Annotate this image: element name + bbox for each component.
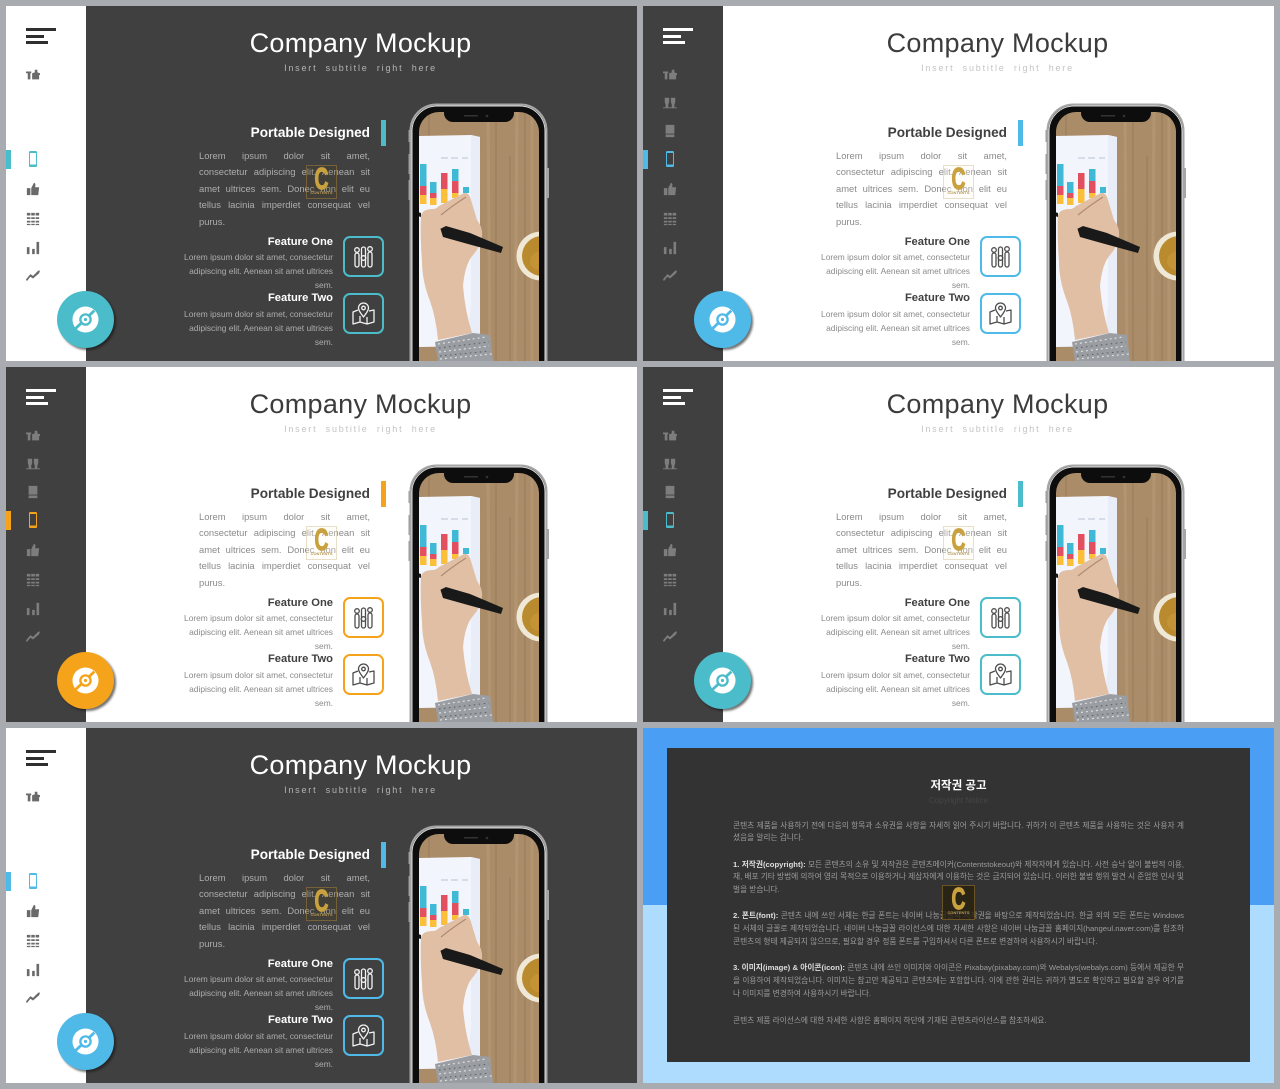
icon: disc button	[56, 1012, 114, 1070]
feature one text: adipiscing elit. Aenean sit amet ultrices	[189, 266, 333, 276]
feature two text: Lorem ipsum dolor sit amet, consectetur	[821, 309, 970, 319]
phone mockup	[1046, 104, 1186, 361]
icon: map	[980, 654, 1021, 695]
subtitle: Insert subtitle right here	[284, 424, 437, 434]
icon: map	[343, 654, 384, 695]
icon: disc button	[56, 290, 114, 348]
feature two text: adipiscing elit. Aenean sit amet ultrices	[189, 1045, 333, 1055]
phone mockup	[408, 104, 549, 361]
sidebar	[6, 6, 86, 361]
watermark: CONTENTS	[310, 190, 332, 195]
watermark	[306, 526, 337, 560]
feature two text	[184, 309, 333, 347]
panel: slide 5 dark blue	[6, 728, 637, 1083]
text block: tellus lacinia imperdiet consequat vel	[836, 560, 1007, 571]
dark notice card: 벌을 받습니다.	[733, 885, 780, 894]
text block: amet ultrices sem. Donec non elit eu	[199, 544, 370, 555]
feature one text	[184, 252, 333, 290]
text block: tellus lacinia imperdiet consequat vel	[199, 560, 370, 571]
heading: Portable Designed	[251, 847, 370, 862]
sidebar	[6, 728, 86, 1083]
text block: consectetur adipiscing elit. Aenean sit	[836, 527, 1007, 538]
text block: purus.	[199, 577, 225, 588]
feature one title: Feature One	[905, 597, 970, 609]
title: Company Mockup	[250, 28, 471, 58]
feature one text	[821, 613, 970, 651]
accent bar	[381, 120, 386, 146]
watermark: CONTENTS	[948, 190, 970, 195]
text block: consectetur adipiscing elit. Aenean sit	[199, 166, 370, 177]
panel: slide 4 light teal	[643, 367, 1274, 722]
accent bar	[381, 842, 386, 868]
main panel background	[86, 367, 637, 722]
title: Company Mockup	[887, 28, 1108, 58]
icon: sliders	[343, 236, 384, 277]
feature one text: Lorem ipsum dolor sit amet, consectetur	[821, 252, 970, 262]
feature two text: Lorem ipsum dolor sit amet, consectetur	[184, 1031, 333, 1041]
text block	[199, 150, 370, 227]
icon: sliders	[980, 597, 1021, 638]
heading: Portable Designed	[251, 125, 370, 140]
icon: map	[980, 293, 1021, 334]
text block: consectetur adipiscing elit. Aenean sit	[836, 166, 1007, 177]
feature two text: adipiscing elit. Aenean sit amet ultrices	[826, 323, 970, 333]
feature one text: Lorem ipsum dolor sit amet, consectetur	[184, 252, 333, 262]
notice title: 저작권 공고	[930, 780, 987, 792]
text block: amet ultrices sem. Donec non elit eu	[199, 183, 370, 194]
feature one text: sem.	[315, 641, 333, 651]
icon: disc button	[694, 652, 750, 708]
icon: sliders	[343, 958, 384, 999]
watermark: CONTENTS	[310, 551, 332, 556]
feature two title: Feature Two	[268, 1014, 333, 1026]
feature one title: Feature One	[268, 958, 333, 970]
feature two title: Feature Two	[268, 292, 333, 304]
panel: slide 3 light orange	[6, 367, 637, 722]
text block: Lorem ipsum dolor sit amet,	[836, 511, 1007, 522]
feature two text: adipiscing elit. Aenean sit amet ultrices	[189, 323, 333, 333]
text block	[199, 872, 370, 949]
text block: purus.	[199, 216, 225, 227]
text block: purus.	[199, 938, 225, 949]
sidebar	[6, 367, 86, 722]
icon: disc button	[694, 290, 750, 348]
notice footer: 콘텐츠 제품 라이선스에 대한 자세한 사항은 홈페이지 하단에 기재된 콘텐츠라이선스를 참조하세요.	[733, 1016, 1046, 1025]
panel: copyright notice slide	[643, 728, 1274, 1083]
main panel background	[86, 728, 637, 1083]
heading: Portable Designed	[888, 125, 1007, 140]
dark notice card	[667, 748, 1250, 1062]
panel: slide 1 dark teal	[6, 6, 637, 361]
icon: sliders	[343, 597, 384, 638]
accent bar	[381, 481, 386, 507]
subtitle: Insert subtitle right here	[921, 424, 1074, 434]
feature one title: Feature One	[268, 236, 333, 248]
text block: Lorem ipsum dolor sit amet,	[199, 150, 370, 161]
feature two text: sem.	[315, 337, 333, 347]
text block: Lorem ipsum dolor sit amet,	[836, 150, 1007, 161]
text block: Lorem ipsum dolor sit amet,	[199, 511, 370, 522]
feature two text: sem.	[315, 698, 333, 708]
text block: Lorem ipsum dolor sit amet,	[199, 872, 370, 883]
feature one text: adipiscing elit. Aenean sit amet ultrices	[189, 627, 333, 637]
watermark	[943, 526, 974, 560]
feature two text: sem.	[315, 1059, 333, 1069]
feature two text	[184, 1031, 333, 1069]
feature one text	[184, 613, 333, 651]
watermark	[306, 887, 337, 921]
feature one text: Lorem ipsum dolor sit amet, consectetur	[184, 974, 333, 984]
title: Company Mockup	[250, 389, 471, 419]
icon: sliders	[980, 236, 1021, 277]
watermark	[306, 165, 337, 199]
subtitle: Insert subtitle right here	[284, 63, 437, 73]
feature two text	[184, 670, 333, 708]
feature one text: adipiscing elit. Aenean sit amet ultrices	[189, 988, 333, 998]
subtitle: Insert subtitle right here	[284, 785, 437, 795]
feature one text: Lorem ipsum dolor sit amet, consectetur	[184, 613, 333, 623]
dark notice card: 콘텐츠의 형태 제공되지 않으므로, 필요할 경우 정품 폰트를 구입하셔서 다른 폰트로 변경하여 사용하시기 바랍니다.	[733, 937, 1097, 946]
text block: amet ultrices sem. Donec non elit eu	[836, 183, 1007, 194]
dark notice card: 나 이미지를 변경하여 사용하시기 바랍니다.	[733, 989, 871, 998]
text block: purus.	[836, 216, 862, 227]
icon: disc button	[56, 652, 114, 708]
text block	[836, 511, 1007, 588]
text block: purus.	[836, 577, 862, 588]
feature two text	[821, 670, 970, 708]
phone mockup	[1046, 464, 1186, 722]
main panel background	[723, 6, 1274, 361]
feature one text: adipiscing elit. Aenean sit amet ultrices	[826, 627, 970, 637]
text block: amet ultrices sem. Donec non elit eu	[199, 905, 370, 916]
feature one text: sem.	[315, 280, 333, 290]
feature one text	[184, 974, 333, 1012]
feature one text: sem.	[315, 1002, 333, 1012]
feature one text: sem.	[952, 641, 970, 651]
panel: slide 2 light blue	[643, 6, 1274, 361]
feature two text: Lorem ipsum dolor sit amet, consectetur	[184, 309, 333, 319]
feature one text: sem.	[952, 280, 970, 290]
feature one text: adipiscing elit. Aenean sit amet ultrices	[826, 266, 970, 276]
watermark: CONTENTS	[948, 910, 970, 915]
phone mockup	[408, 464, 549, 722]
main panel background	[723, 367, 1274, 722]
text block	[199, 511, 370, 588]
accent bar	[1018, 481, 1023, 507]
feature two text: Lorem ipsum dolor sit amet, consectetur	[184, 670, 333, 680]
feature two title: Feature Two	[268, 653, 333, 665]
feature one text: Lorem ipsum dolor sit amet, consectetur	[821, 613, 970, 623]
feature two text: adipiscing elit. Aenean sit amet ultrices	[826, 684, 970, 694]
text block: consectetur adipiscing elit. Aenean sit	[199, 527, 370, 538]
dark notice card: 셨음을 알리는 겁니다.	[733, 833, 803, 842]
text block: amet ultrices sem. Donec non elit eu	[836, 544, 1007, 555]
title: Company Mockup	[250, 750, 471, 780]
watermark	[943, 165, 974, 199]
notice subtitle: Copyright Notice	[929, 796, 988, 805]
watermark: CONTENTS	[310, 912, 332, 917]
text block	[836, 150, 1007, 227]
text block: tellus lacinia imperdiet consequat vel	[836, 199, 1007, 210]
text block: tellus lacinia imperdiet consequat vel	[199, 921, 370, 932]
title: Company Mockup	[887, 389, 1108, 419]
feature one title: Feature One	[268, 597, 333, 609]
watermark	[942, 885, 975, 920]
feature one text	[821, 252, 970, 290]
phone mockup	[408, 826, 549, 1083]
text block: consectetur adipiscing elit. Aenean sit	[199, 888, 370, 899]
feature two text: Lorem ipsum dolor sit amet, consectetur	[821, 670, 970, 680]
feature two text: sem.	[952, 698, 970, 708]
feature two title: Feature Two	[905, 292, 970, 304]
feature two text	[821, 309, 970, 347]
feature two text: sem.	[952, 337, 970, 347]
sidebar	[643, 6, 723, 361]
watermark: CONTENTS	[948, 551, 970, 556]
icon: map	[343, 1015, 384, 1056]
feature two text: adipiscing elit. Aenean sit amet ultrices	[189, 684, 333, 694]
main panel background	[86, 6, 637, 361]
icon: map	[343, 293, 384, 334]
heading: Portable Designed	[888, 486, 1007, 501]
accent bar	[1018, 120, 1023, 146]
heading: Portable Designed	[251, 486, 370, 501]
sidebar	[643, 367, 723, 722]
feature two title: Feature Two	[905, 653, 970, 665]
feature one title: Feature One	[905, 236, 970, 248]
subtitle: Insert subtitle right here	[921, 63, 1074, 73]
text block: tellus lacinia imperdiet consequat vel	[199, 199, 370, 210]
